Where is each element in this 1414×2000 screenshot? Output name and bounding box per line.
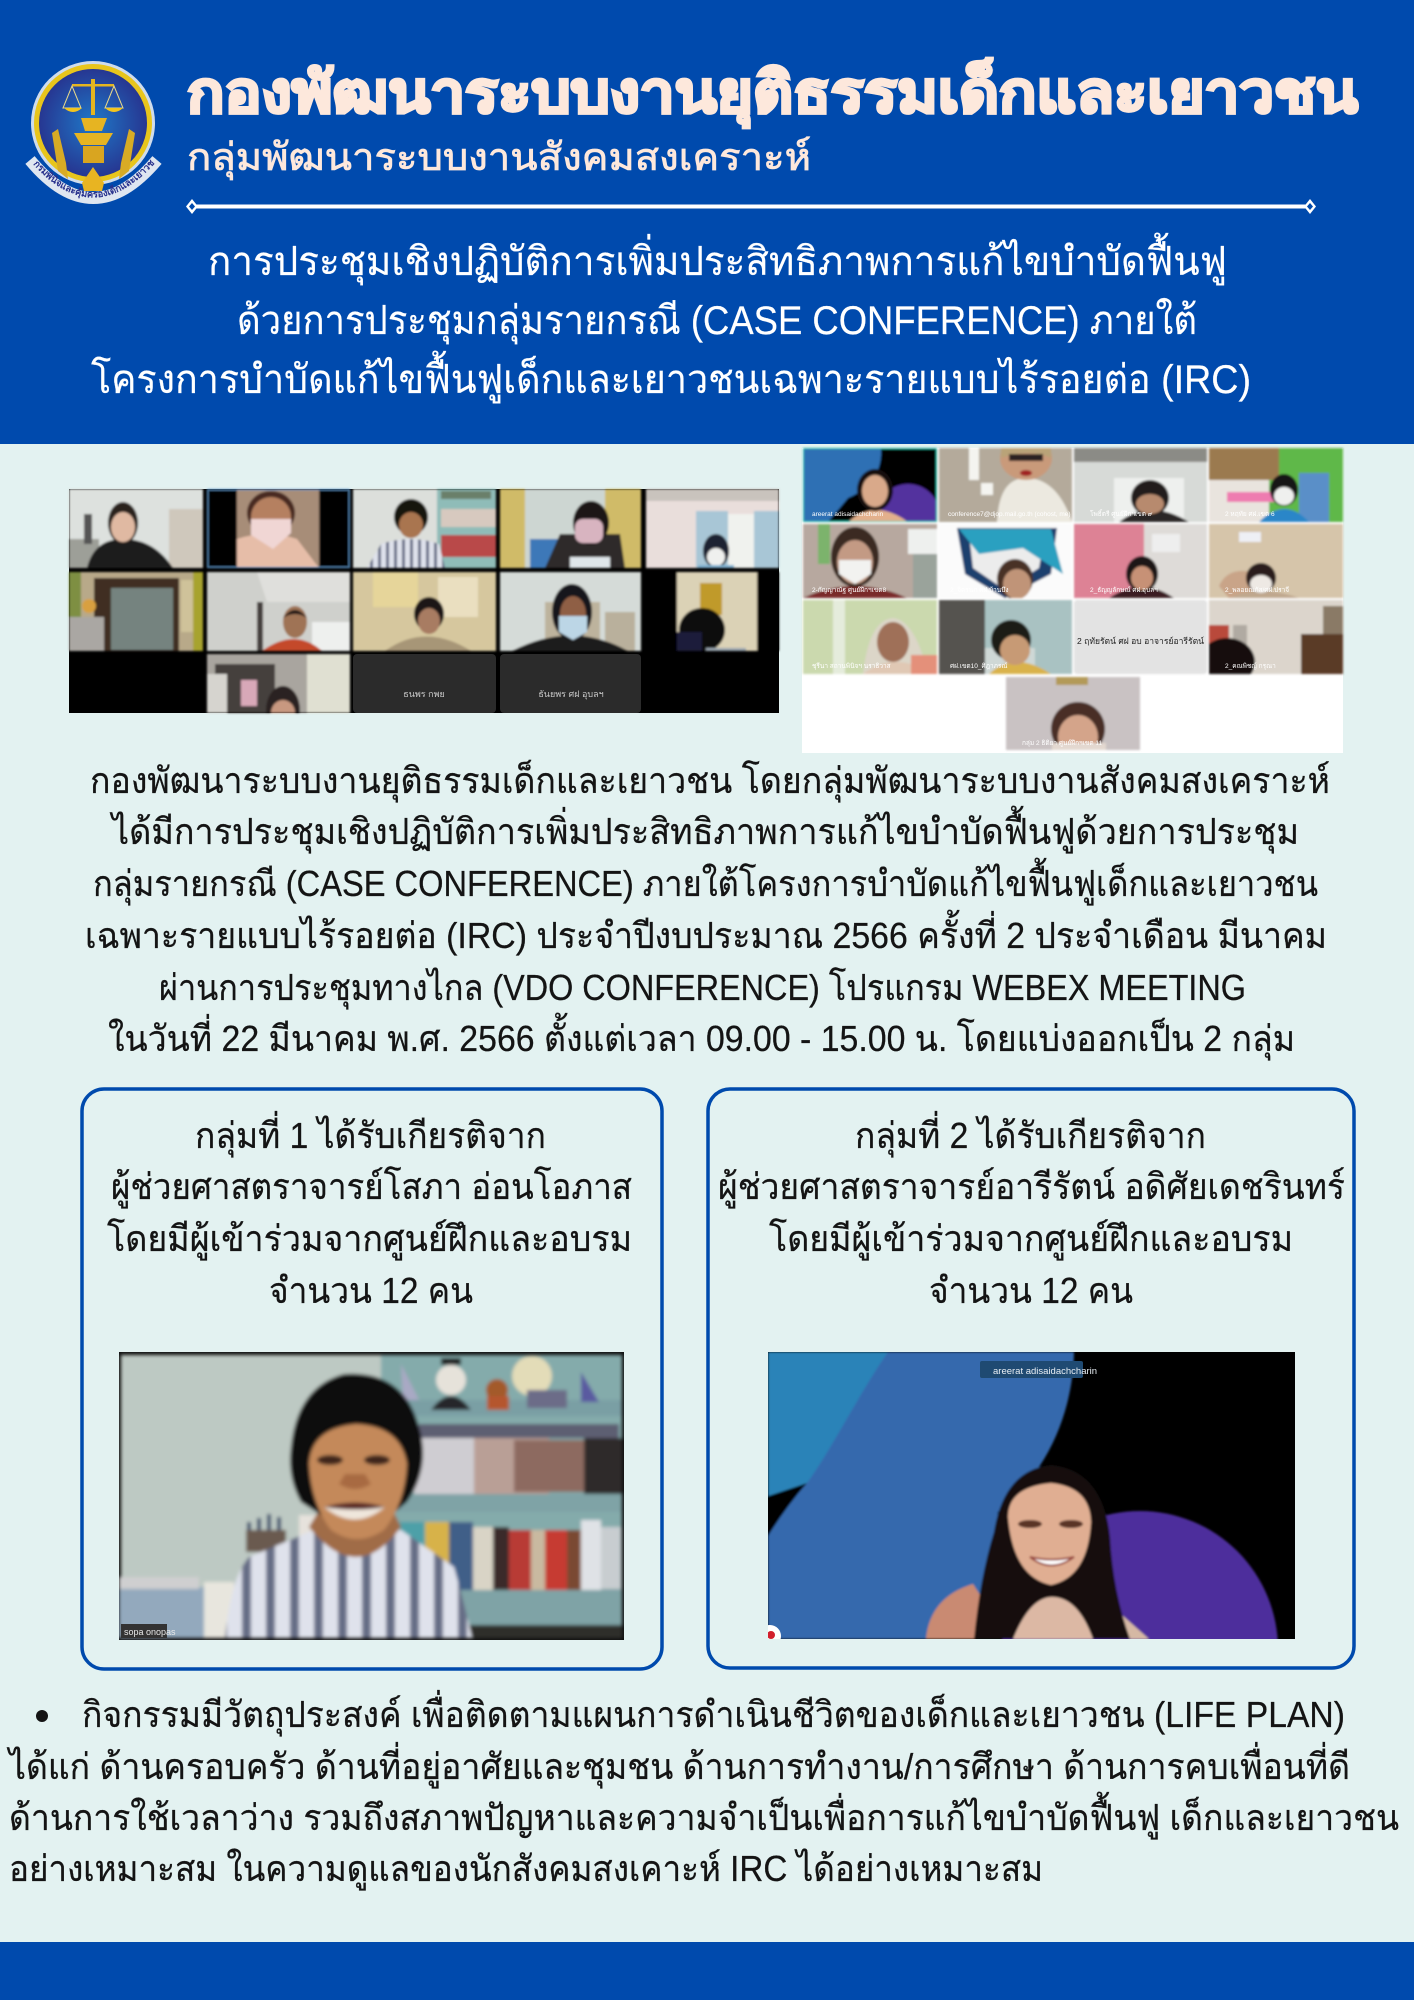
header band — [0, 0, 1414, 444]
group 1 text: ผู้ช่วยศาสตราจารย์โสภา อ่อนโอภาส — [111, 1166, 632, 1209]
group 1 text — [107, 1111, 632, 1311]
group 2 text: กลุ่มที่ 2 ได้รับเกียรติจาก — [855, 1111, 1206, 1158]
group 2 text: ผู้ช่วยศาสตราจารย์อารีรัตน์ อดิศัยเดชรินทร์ — [718, 1166, 1345, 1209]
video tile name labels: โพธิ์ตรี ศูนย์ฝึกฯเขต ๙ — [1090, 509, 1153, 518]
photo: speaker areerat: areerat adisaidachcharin — [993, 1366, 1097, 1377]
video tile name labels: conference7@djop.mail.go.th (cohost, me) — [948, 511, 1071, 518]
photo: group 1 video call grid: ธนพร กพย — [403, 689, 445, 699]
subtitle: กลุ่มพัฒนาระบบงานสังคมสงเคราะห์ — [187, 136, 811, 180]
icon: bullet — [36, 1710, 48, 1722]
video tile name labels: ชุรีนา สถานพินิจฯ นราธิวาส — [812, 662, 891, 670]
video tile name labels: 2_พลอยณภัส/ศฝ.ปราจี — [1225, 586, 1289, 594]
video tile name labels: 2 ฤทัยรัตน์ ศฝ อบ อาจารย์อารีรัตน์ — [1077, 636, 1204, 646]
intro paragraph: กลุ่มรายกรณี (CASE CONFERENCE) ภายใต้โครงการบำบัดแก้ไขฟื้นฟูเด็กและเยาวชน — [93, 857, 1318, 906]
intro paragraph: ได้มีการประชุมเชิงปฏิบัติการเพิ่มประสิทธิภาพการแก้ไขบำบัดฟื้นฟูด้วยการประชุม — [109, 805, 1299, 854]
group 2 text — [718, 1111, 1345, 1311]
group 1 text: กลุ่มที่ 1 ได้รับเกียรติจาก — [195, 1111, 546, 1158]
group 2 text: จำนวน 12 คน — [929, 1270, 1133, 1311]
intro paragraph: กองพัฒนาระบบงานยุติธรรมเด็กและเยาวชน โดยกลุ่มพัฒนาระบบงานสังคมสงเคราะห์ — [90, 758, 1330, 803]
video tile name labels: areerat adisaidachcharin — [812, 511, 884, 518]
video tile name labels: 2-กัญญาณัฐ ศูนย์ฝึกฯเขต8 — [812, 586, 887, 594]
photo: group 2 video call grid — [802, 436, 1343, 759]
intro paragraph — [85, 758, 1330, 1061]
video tile name labels: 2_จิตรนภ ศฝ.บ้านบึง — [950, 586, 1009, 594]
photo: speaker sopa onopas: sopa onopas — [124, 1627, 176, 1637]
intro paragraph: ผ่านการประชุมทางไกล (VDO CONFERENCE) โปรแกรม WEBEX MEETING — [159, 967, 1246, 1010]
workshop heading: การประชุมเชิงปฏิบัติการเพิ่มประสิทธิภาพการแก้ไขบำบัดฟื้นฟู — [208, 232, 1227, 286]
photo: speaker areerat — [768, 1352, 1295, 1639]
bullet paragraph — [6, 1690, 1399, 1891]
photo: group 1 video call grid — [69, 489, 779, 734]
video tile name labels: กลุ่ม 2 ธิติยา ศูนย์ฝึกฯเขต 11 — [1022, 739, 1102, 747]
title: กองพัฒนาระบบงานยุติธรรมเด็กและเยาวชน — [187, 57, 1358, 129]
footer band — [0, 1942, 1414, 2000]
panel: group 2 — [708, 1089, 1354, 1787]
group 2 text: โดยมีผู้เข้าร่วมจากศูนย์ฝึกและอบรม — [769, 1218, 1293, 1261]
video tile name labels: ศฝ.เขต10_ศิฎาภรณ์ — [950, 662, 1007, 670]
workshop heading: โครงการบำบัดแก้ไขฟื้นฟูเด็กและเยาวชนเฉพาะรายแบบไร้รอยต่อ (IRC) — [91, 350, 1251, 403]
panel: group 1 — [82, 1089, 662, 1669]
video tile name labels: 2 หฤทัย ศฝ.เขต 6 — [1225, 510, 1275, 518]
photo: group 1 video call grid: ธันยพร ศฝ อุบลฯ — [538, 689, 604, 700]
bullet paragraph: กิจกรรมมีวัตถุประสงค์ เพื่อติดตามแผนการดำเนินชีวิตของเด็กและเยาวชน (LIFE PLAN) — [82, 1690, 1345, 1737]
group 1 text: โดยมีผู้เข้าร่วมจากศูนย์ฝึกและอบรม — [107, 1218, 632, 1261]
video tile name labels: 2_คณพิชญ์ กรุณา — [1225, 662, 1276, 670]
bullet paragraph: ได้แก่ ด้านครอบครัว ด้านที่อยู่อาศัยและชุมชน ด้านการทำงาน/การศึกษา ด้านการคบเพื่อนที่ดี — [6, 1742, 1350, 1789]
workshop heading — [91, 232, 1251, 403]
intro paragraph: เฉพาะรายแบบไร้รอยต่อ (IRC) ประจำปีงบประมาณ 2566 ครั้งที่ 2 ประจำเดือน มีนาคม — [85, 909, 1327, 956]
bullet paragraph: อย่างเหมาะสม ในความดูแลของนักสังคมสงเคาะห์ IRC ได้อย่างเหมาะสม — [9, 1848, 1043, 1891]
intro paragraph: ในวันที่ 22 มีนาคม พ.ศ. 2566 ตั้งแต่เวลา 09.00 - 15.00 น. โดยแบ่งออกเป็น 2 กลุ่ม — [108, 1012, 1295, 1061]
icon: department emblem — [25, 61, 162, 204]
photo: speaker sopa onopas — [119, 1352, 624, 1640]
group 1 text: จำนวน 12 คน — [269, 1270, 473, 1311]
workshop heading: ด้วยการประชุมกลุ่มรายกรณี (CASE CONFERENCE) ภายใต้ — [237, 297, 1197, 345]
video tile name labels — [812, 509, 1289, 747]
video tile name labels: 2_ธัญญลักษณ์ ศฝ.อุบลฯ — [1090, 586, 1158, 594]
